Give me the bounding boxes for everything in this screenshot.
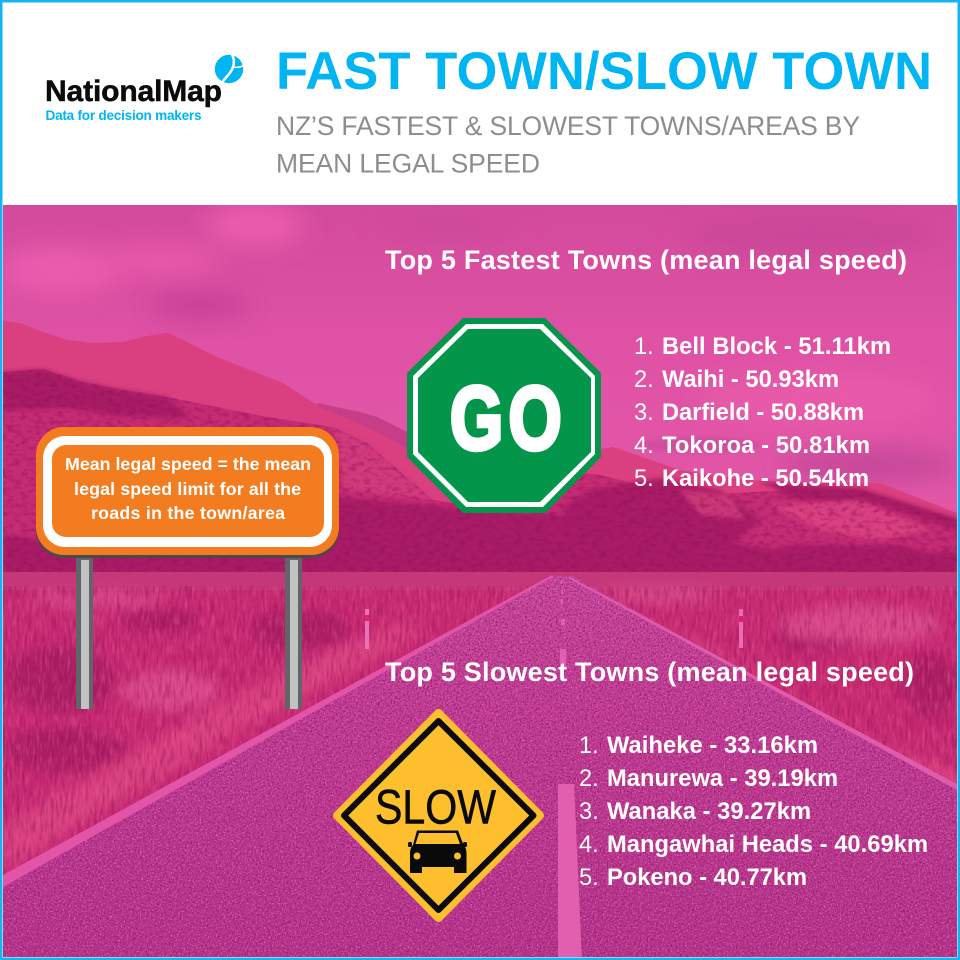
slowest 2: 2. (579, 766, 599, 792)
hill texture (3, 360, 957, 575)
slowest 5: Pokeno - 40.77km (607, 865, 807, 891)
road surface (3, 575, 957, 960)
subtitle (276, 111, 860, 178)
sign text: roads in the town/area (91, 503, 285, 523)
fastest 5: Kaikohe - 50.54km (662, 466, 869, 492)
fastest 1: 1. (634, 334, 654, 360)
title: FAST TOWN/SLOW TOWN (276, 42, 932, 101)
background photo: tinted road and hills (0, 203, 960, 960)
lower dark hillside (3, 369, 957, 575)
list: slowest towns (579, 733, 928, 891)
icon: green GO octagon sign: GO (450, 368, 567, 468)
fields and grass (3, 572, 957, 892)
callout: orange roadside sign defining mean legal speed (36, 427, 339, 709)
sky with clouds (0, 203, 960, 535)
subtitle: MEAN LEGAL SPEED (276, 148, 540, 178)
fastest 5: 5. (634, 466, 654, 492)
list: fastest towns (634, 334, 891, 492)
icon: green GO octagon sign (407, 318, 601, 513)
fastest 3: Darfield - 50.88km (662, 400, 864, 426)
slowest 3: Wanaka - 39.27km (607, 799, 811, 825)
logo: NationalMap (45, 53, 245, 123)
slowest 3: 3. (579, 799, 599, 825)
sign board (36, 427, 339, 558)
icon: yellow SLOW diamond sign (337, 713, 540, 918)
sign posts (76, 555, 302, 709)
sign text: Mean legal speed = the mean (65, 454, 311, 474)
slowest 4: Mangawhai Heads - 40.69km (607, 832, 928, 858)
roadside marker posts (365, 609, 743, 649)
main mountain (3, 321, 957, 520)
logo icon (215, 53, 245, 85)
slowest 1: 1. (579, 733, 599, 759)
icon: yellow SLOW diamond sign: SLOW (375, 782, 497, 834)
centre dashes (558, 580, 582, 960)
sunlit slope beside the sign (335, 431, 428, 498)
heading: slowest towns: Top 5 Slowest Towns (mean legal speed) (385, 657, 914, 687)
sunlit patches (680, 490, 930, 540)
fastest 2: Waihi - 50.93km (662, 367, 839, 393)
fastest 3: 3. (634, 400, 654, 426)
slowest 4: 4. (579, 832, 599, 858)
sign text: legal speed limit for all the (74, 479, 301, 499)
slowest 2: Manurewa - 39.19km (607, 766, 838, 792)
fastest 1: Bell Block - 51.11km (662, 334, 891, 360)
heading: fastest towns: Top 5 Fastest Towns (mean legal speed) (385, 245, 907, 275)
logo tagline: Data for decision makers (46, 108, 202, 123)
shrub bands (3, 369, 957, 575)
road edge lines (3, 575, 554, 887)
fastest 4: 4. (634, 433, 654, 459)
slowest 1: Waiheke - 33.16km (607, 733, 818, 759)
sign text (65, 454, 311, 523)
distant hill (317, 403, 407, 448)
slowest 5: 5. (579, 865, 599, 891)
fastest 4: Tokoroa - 50.81km (662, 433, 870, 459)
car (408, 830, 467, 873)
subtitle: NZ’S FASTEST & SLOWEST TOWNS/AREAS BY (276, 111, 860, 141)
logo wordmark: NationalMap (45, 75, 222, 108)
fastest 2: 2. (634, 367, 654, 393)
header panel (0, 0, 960, 205)
